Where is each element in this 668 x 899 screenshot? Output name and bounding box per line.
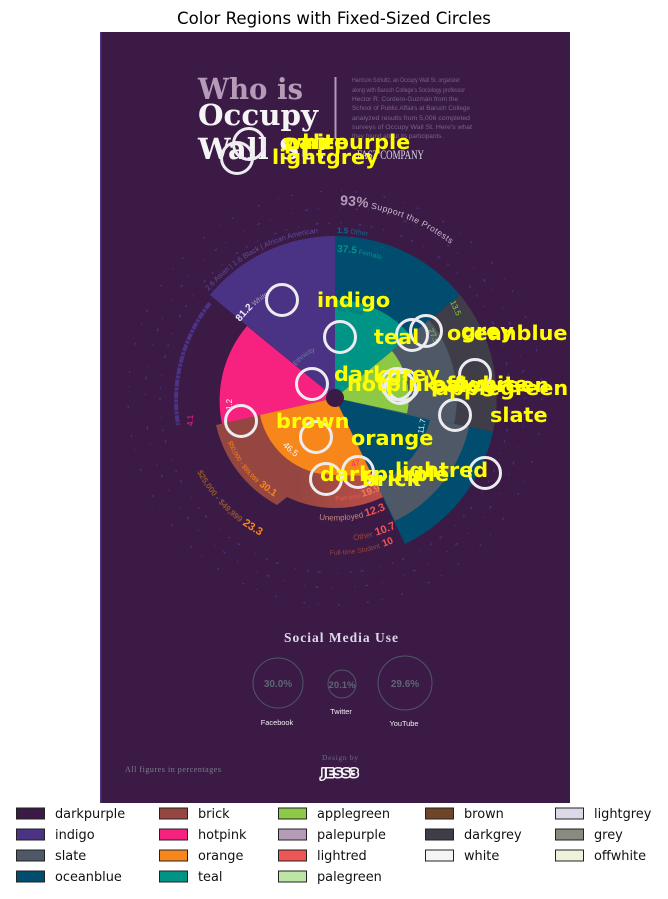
legend: darkgrey xyxy=(464,828,522,843)
footnote: All figures in percentages xyxy=(125,765,221,774)
intro paragraph: they found about its participants. xyxy=(352,133,443,140)
heading: Who is Occupy Wall St?: Who is xyxy=(197,72,303,106)
legend: palegreen xyxy=(317,870,382,885)
annotation labels: white xyxy=(283,130,348,154)
social circle: Twitter: 20.1% xyxy=(329,680,356,691)
wedge: slate inner xyxy=(335,320,457,424)
annotation labels xyxy=(272,130,568,491)
legend: lightred xyxy=(317,849,367,864)
annotation labels: grey xyxy=(461,319,514,343)
legend xyxy=(16,807,652,885)
legend: indigo xyxy=(55,828,95,843)
intro paragraph: Harrison Schultz, an Occupy Wall St. organizer xyxy=(352,77,461,84)
wedge: hotpink xyxy=(220,326,335,424)
small radial values: 46 xyxy=(383,368,396,381)
arc label: other: 1.5Other xyxy=(338,228,368,236)
chart title: Color Regions with Fixed-Sized Circles xyxy=(177,9,491,28)
intro paragraph: analyzed results from 5,006 completed xyxy=(352,115,470,122)
small radial values: 13.5 xyxy=(448,299,463,317)
radial chart xyxy=(210,236,497,544)
faint outer dotted rings xyxy=(128,191,542,605)
wedge: applegreen xyxy=(335,351,409,414)
intro paragraph: Hector R. Cordero-Guzmán from the xyxy=(352,96,458,103)
heading: social media use: Social Media Use xyxy=(284,630,398,645)
social circle: YouTube: 29.6% xyxy=(391,679,419,690)
wedge: oceanblue outer lower xyxy=(335,398,493,544)
small radial values: 1.2 xyxy=(225,398,234,410)
arc label: income 30.1: $50,000 - $99,99930.1 xyxy=(228,440,276,497)
arc label: male: 61 Male xyxy=(338,306,363,315)
intro paragraph: surveys of Occupy Wall St. Here's what xyxy=(352,124,472,131)
legend: grey xyxy=(594,828,623,843)
annotation labels: applegreen xyxy=(435,376,568,400)
annotation labels: teal xyxy=(374,325,419,349)
annotation labels: darkgrey xyxy=(334,362,440,386)
wedge: slate lower xyxy=(335,398,469,521)
arc label: unemployed 12.3: Unemployed12.3 xyxy=(320,504,385,522)
legend: oceanblue xyxy=(55,870,122,885)
legend: brick xyxy=(198,807,230,822)
wedge: brick and lightred employment ring xyxy=(216,398,383,508)
legend: white xyxy=(464,849,499,864)
social circle: Twitter: Twitter xyxy=(330,707,352,716)
dashed indigo band xyxy=(176,303,210,425)
wedge: indigo ethnicity xyxy=(210,236,335,398)
legend: orange xyxy=(198,849,243,864)
social circle: Facebook xyxy=(253,658,303,727)
wedge: darkgrey outer xyxy=(335,295,497,432)
social circle: Twitter xyxy=(328,670,356,716)
heading divider xyxy=(334,77,336,139)
wedge: oceanblue gender xyxy=(335,236,460,398)
annotation labels: slate xyxy=(490,403,548,427)
legend: teal xyxy=(198,870,222,885)
wedge: orange xyxy=(260,398,372,476)
annotation labels: brown xyxy=(276,409,349,433)
legend: offwhite xyxy=(594,849,646,864)
logo: JESS3: JESS3 xyxy=(320,766,358,780)
arc label: income 23.3: $25,000 - $49,99923.3 xyxy=(198,470,263,535)
annotation labels: hotpink xyxy=(347,372,438,396)
annotation labels: brick xyxy=(362,467,422,491)
heading: Who is Occupy Wall St? xyxy=(197,72,330,166)
arc label: part-time 19.9: Part-time19.9 xyxy=(336,485,380,500)
social circle: YouTube xyxy=(378,656,432,728)
annotation labels: offwhite xyxy=(432,372,528,396)
arc label: ethnicity: Ethnicity xyxy=(293,348,314,366)
small radial values: 11.7 xyxy=(416,417,428,434)
legend: darkpurple xyxy=(55,807,125,822)
legend: hotpink xyxy=(198,828,247,843)
annotation labels: lightred xyxy=(395,458,488,482)
arc label: white 81.2: 81.2White xyxy=(236,293,266,321)
annotation circles xyxy=(222,128,500,494)
arc label: female: 37.5Female xyxy=(337,245,382,260)
Fast Company logo: FAST COMPANY xyxy=(357,147,424,162)
small radial values: 47 xyxy=(350,458,362,469)
social circle: Facebook: Facebook xyxy=(261,718,294,727)
annotation labels: darkpurple xyxy=(320,462,449,486)
arc label: full-time student 10: Full-time Student10 xyxy=(330,537,393,555)
annotation labels: palepurple xyxy=(284,130,410,154)
arc label: 93% support the protests: 93%Support the Protests xyxy=(340,195,452,244)
annotation labels: palegreen xyxy=(431,373,549,397)
small radial values: 27.5 xyxy=(426,327,441,345)
social circle: Facebook: 30.0% xyxy=(264,679,292,690)
wedge: oceanblue inner lower xyxy=(335,398,430,485)
arc label: asian and black: 2.6 Asian | 1.6 Black | African American xyxy=(206,229,318,290)
intro paragraph xyxy=(352,77,472,140)
intro paragraph: along with Baruch College's Sociology professor xyxy=(352,87,466,94)
annotation labels: orange xyxy=(351,426,433,450)
small radial values: 4.1 xyxy=(186,414,195,426)
infographic background panel xyxy=(100,32,570,803)
wedge: teal gender xyxy=(335,300,411,398)
centre hub xyxy=(326,389,344,407)
small radial values xyxy=(186,299,463,469)
credit: design by: Design by xyxy=(322,753,358,762)
arc label: 46.5: 46.5 xyxy=(283,443,298,456)
legend: applegreen xyxy=(317,807,390,822)
social circle: YouTube: YouTube xyxy=(389,719,419,728)
legend: slate xyxy=(55,849,86,864)
heading: Who is Occupy Wall St?: Occupy xyxy=(198,98,319,132)
legend: lightgrey xyxy=(594,807,652,822)
panel left edge xyxy=(100,32,102,803)
annotation labels: lightgrey xyxy=(272,145,379,169)
annotation labels: indigo xyxy=(317,288,390,312)
legend: brown xyxy=(464,807,504,822)
annotation labels: oceanblue xyxy=(447,321,568,345)
heading: Who is Occupy Wall St?: Wall St? xyxy=(197,132,330,166)
legend: palepurple xyxy=(317,828,386,843)
arc label: other 10.7: Other10.7 xyxy=(354,521,394,540)
intro paragraph: School of Public Affairs at Baruch College xyxy=(352,105,470,112)
